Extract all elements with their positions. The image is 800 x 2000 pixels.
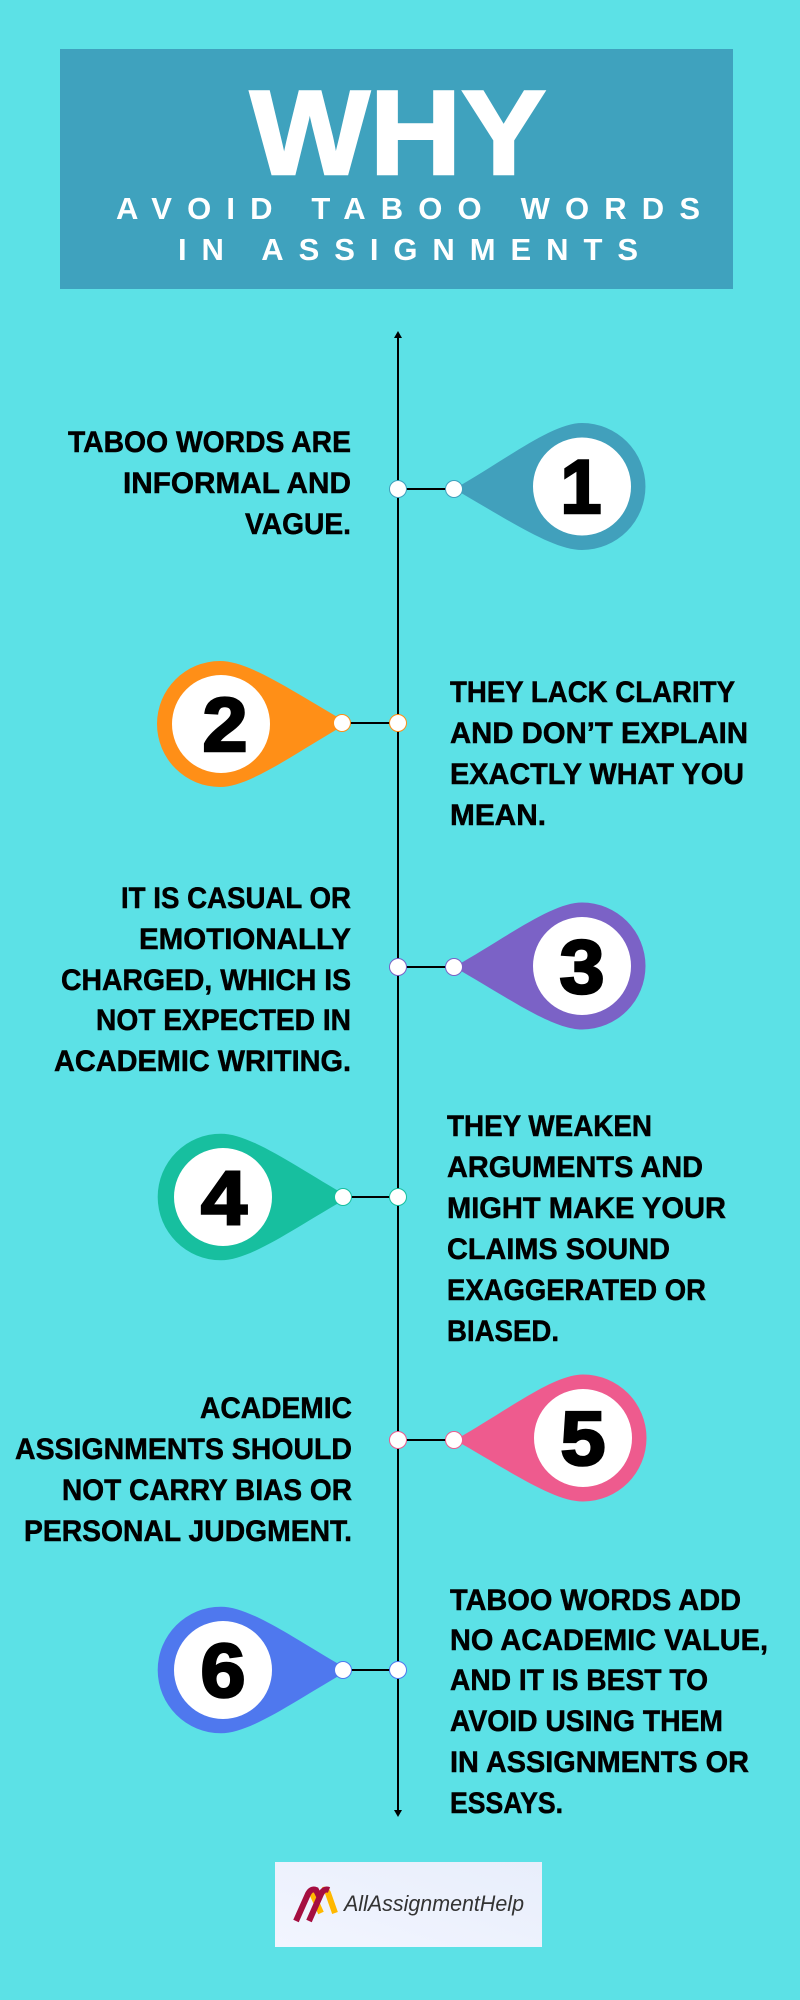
- step 5 text: ACADEMIC: [200, 1392, 352, 1425]
- step 5 pin: 5: [560, 1397, 606, 1482]
- subtitle: IN ASSIGNMENTS: [178, 232, 638, 267]
- step 5 pin: [390, 1374, 646, 1502]
- step 6 text: AVOID USING THEM: [450, 1705, 723, 1738]
- step 5 text: PERSONAL JUDGMENT.: [24, 1515, 352, 1548]
- step 6 text: NO ACADEMIC VALUE,: [450, 1624, 768, 1657]
- subtitle: [116, 191, 700, 267]
- step 3 text: EMOTIONALLY: [139, 923, 351, 956]
- step 5 text: NOT CARRY BIAS OR: [62, 1474, 352, 1507]
- step 6 text: IN ASSIGNMENTS OR: [450, 1746, 749, 1779]
- step 2 pin: [157, 661, 406, 787]
- step 5 text: [15, 1392, 352, 1548]
- step 4 text: ARGUMENTS AND: [447, 1151, 703, 1184]
- logo card: [275, 1862, 542, 1947]
- step 2 text: EXACTLY WHAT YOU: [450, 758, 744, 791]
- step 1 text: INFORMAL AND: [123, 467, 351, 500]
- step 3 text: [54, 882, 351, 1078]
- step 1 text: TABOO WORDS ARE: [68, 426, 351, 459]
- logo wordmark: AllAssignmentHelp: [342, 1891, 524, 1916]
- step 2 text: AND DON’T EXPLAIN: [450, 717, 748, 750]
- step 3 text: NOT EXPECTED IN: [96, 1004, 351, 1037]
- step 3 pin: [390, 902, 646, 1030]
- step 4 pin: 4: [201, 1156, 247, 1241]
- step 6 pin: 6: [200, 1629, 246, 1714]
- title: WHY: WHY: [250, 66, 546, 200]
- step 3 pin: 3: [560, 925, 604, 1010]
- step 2 text: THEY LACK CLARITY: [450, 676, 735, 709]
- step 1 pin: [390, 423, 645, 550]
- step 4 text: THEY WEAKEN: [447, 1110, 652, 1143]
- step 1 text: VAGUE.: [245, 508, 351, 541]
- title banner: [60, 49, 733, 289]
- step 3 text: ACADEMIC WRITING.: [54, 1045, 351, 1078]
- step 1 pin: 1: [560, 445, 602, 530]
- step 5 text: ASSIGNMENTS SHOULD: [15, 1433, 352, 1466]
- step 6 text: TABOO WORDS ADD: [450, 1584, 741, 1617]
- step 6 text: [450, 1584, 768, 1820]
- step 2 text: [450, 676, 748, 832]
- step 4 text: CLAIMS SOUND: [447, 1233, 670, 1266]
- step 6 text: AND IT IS BEST TO: [450, 1664, 708, 1697]
- step 4 text: EXAGGERATED OR: [447, 1274, 706, 1307]
- icon: logo mark: [296, 1890, 335, 1921]
- step 6 pin: [158, 1607, 406, 1733]
- step 2 text: MEAN.: [450, 799, 546, 832]
- step 4 text: BIASED.: [447, 1315, 559, 1348]
- step 1 text: [68, 426, 351, 541]
- step 2 pin: 2: [202, 683, 248, 768]
- step 3 text: CHARGED, WHICH IS: [61, 964, 351, 997]
- timeline axis with arrows: [394, 331, 402, 1817]
- step 3 text: IT IS CASUAL OR: [121, 882, 351, 915]
- step 4 text: MIGHT MAKE YOUR: [447, 1192, 726, 1225]
- step 4 pin: [158, 1134, 406, 1260]
- step 6 text: ESSAYS.: [450, 1787, 563, 1820]
- subtitle: AVOID TABOO WORDS: [116, 191, 700, 226]
- step 4 text: [447, 1110, 726, 1348]
